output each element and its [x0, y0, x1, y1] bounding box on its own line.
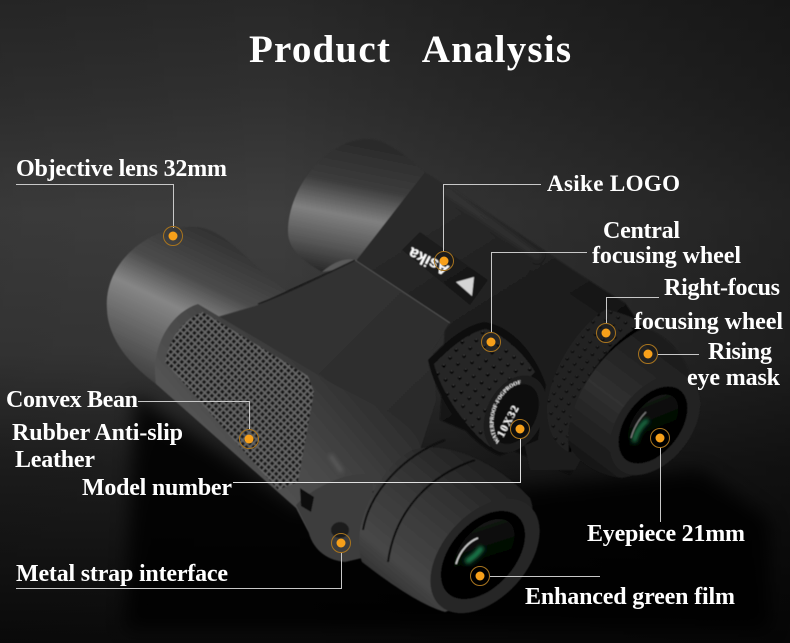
callout: Asike logo — [434, 171, 680, 270]
strap lug — [296, 474, 375, 562]
callout: central focusing wheel: Central — [603, 218, 680, 244]
back objective barrel — [288, 139, 470, 272]
callout: enhanced green film — [470, 566, 735, 610]
callout: objective lens: Objective lens 32mm — [16, 156, 227, 182]
right focus ring — [547, 309, 642, 452]
product photo: binoculars: WATERPROOF-FOGPROOF — [489, 379, 522, 445]
product photo: binoculars: Asika — [406, 244, 452, 278]
callout: Asike logo: Asike LOGO — [547, 171, 680, 196]
callout: model number: Model number — [82, 475, 232, 501]
central focusing wheel — [428, 322, 546, 456]
callout: metal strap interface — [16, 534, 350, 588]
callout: right-focus wheel: Right-focus — [664, 275, 780, 301]
callout: right-focus wheel: focusing wheel — [634, 309, 783, 335]
focusing wheel end cap — [471, 365, 559, 463]
left rubber tube — [155, 304, 421, 560]
Asika logo on body — [402, 232, 488, 305]
left objective barrel — [107, 227, 292, 384]
right lens — [618, 385, 688, 461]
title: Product Analysis — [249, 28, 571, 71]
right tube — [500, 270, 640, 470]
left lens — [442, 508, 526, 594]
callout: rubber grip: Rubber Anti-slip — [12, 420, 183, 446]
callout: eyepiece — [587, 428, 745, 547]
callout: rubber grip: Convex Bean — [6, 387, 138, 413]
callout: model number — [82, 420, 530, 501]
central body plate — [210, 260, 450, 480]
left eyepiece tube — [359, 447, 533, 612]
product photo: binoculars — [106, 142, 700, 614]
right eyepiece cup — [568, 328, 694, 478]
callout: eyepiece: Eyepiece 21mm — [587, 521, 745, 547]
callout: objective lens — [16, 156, 227, 246]
callout: rubber grip: Leather — [15, 447, 95, 473]
callout: rising eye mask: eye mask — [687, 365, 781, 391]
callout: enhanced green film: Enhanced green film — [525, 584, 735, 610]
callout: rising eye mask: Rising — [708, 339, 772, 365]
callout: central focusing wheel: focusing wheel — [592, 243, 741, 269]
left eyepiece rim — [409, 478, 561, 634]
callout: central focusing wheel — [482, 218, 741, 352]
callout: rising eye mask — [638, 339, 781, 391]
callout: rubber grip — [6, 387, 258, 473]
knurled rubber grip — [165, 312, 314, 490]
right eyepiece rim — [592, 358, 718, 492]
callout: right-focus wheel — [596, 275, 783, 342]
back body top — [355, 172, 655, 475]
callout: metal strap interface: Metal strap interface — [16, 561, 228, 587]
model marking on wheel: 10X32 — [495, 403, 522, 439]
hinge notch — [322, 259, 357, 272]
